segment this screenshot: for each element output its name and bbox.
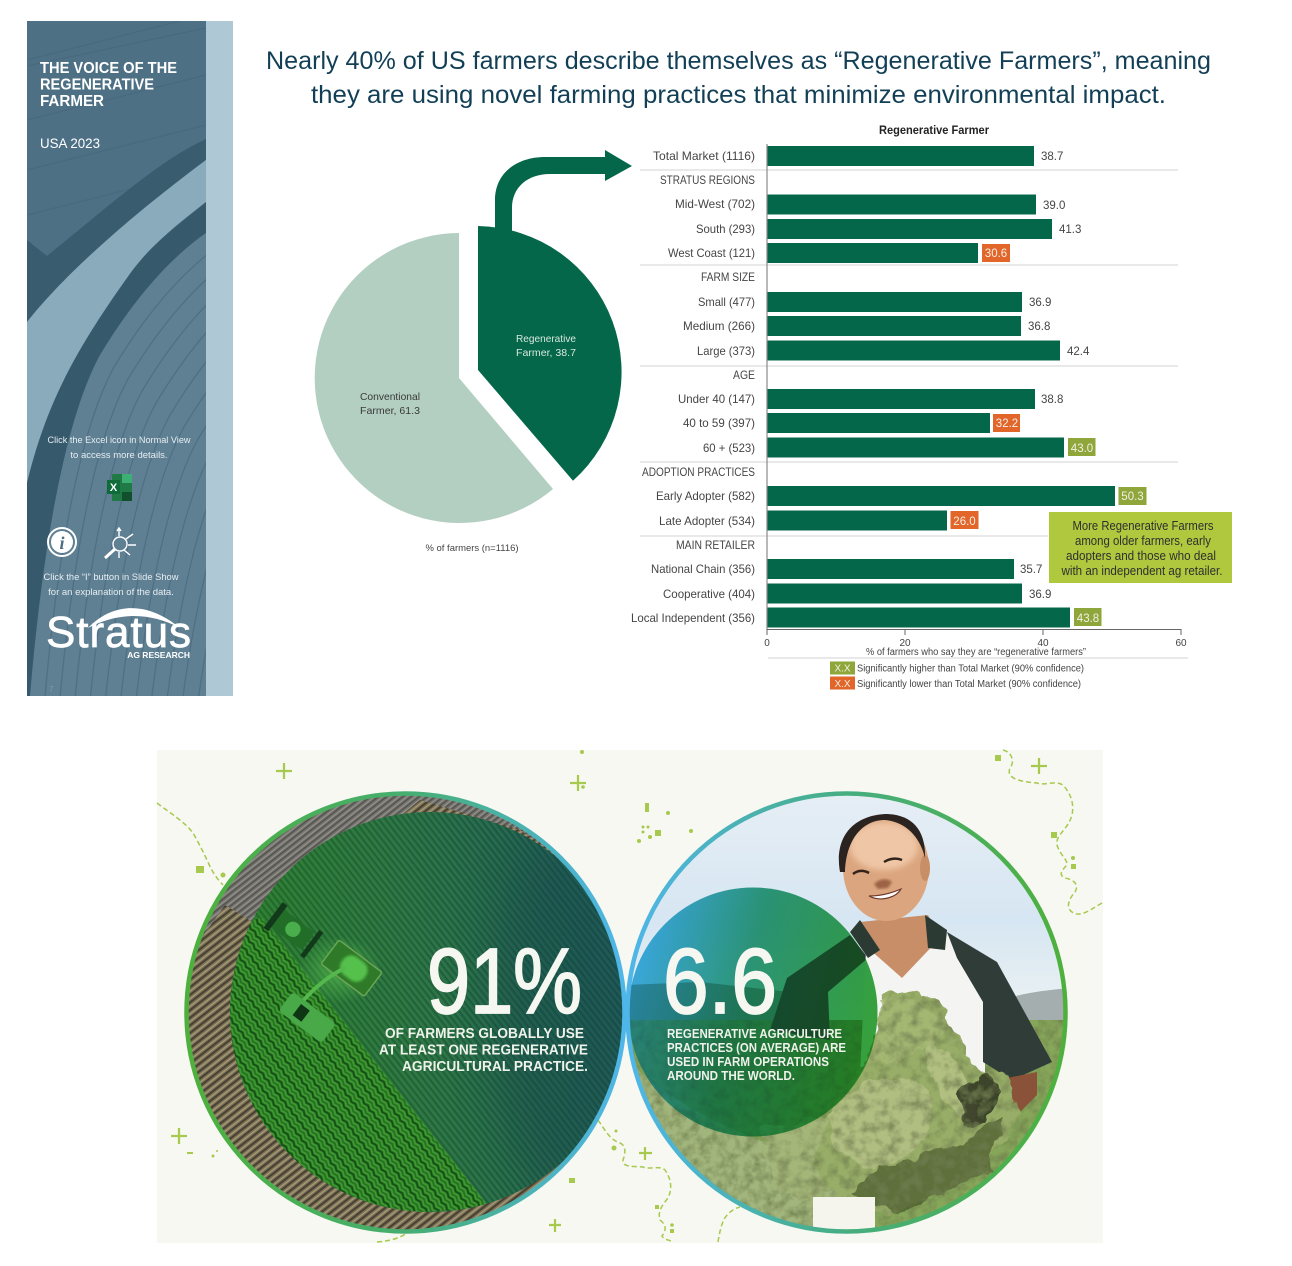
heading: stratus regions: STRATUS REGIONS xyxy=(660,173,755,187)
legend: significantly higher: X.X xyxy=(834,664,851,674)
stat: 91%: 91% xyxy=(427,929,582,1033)
row: west coast: West Coast (121) xyxy=(668,246,755,260)
pie label: regenerative: Regenerative xyxy=(516,333,576,345)
legend: significantly lower: Significantly lower than Total Market (90% confidence) xyxy=(857,679,1081,690)
stat caption: 6.6: AROUND THE WORLD. xyxy=(667,1069,795,1083)
pie slice: regenerative farmer xyxy=(478,226,622,481)
row: 40 to 59: 40 to 59 (397) xyxy=(683,416,755,430)
bar chart: regenerative farmer by segment xyxy=(631,125,1188,658)
row: cooperative xyxy=(663,584,1051,604)
row: mid-west: 39.0 xyxy=(1043,200,1065,212)
row: south xyxy=(696,219,1081,239)
row: 40 to 59 xyxy=(683,413,1020,433)
pie label: conventional: Farmer, 61.3 xyxy=(360,405,420,417)
title: they are using novel farming practices that minimize environmental impact. xyxy=(311,81,1166,109)
sidebar year: USA 2023 xyxy=(40,135,100,151)
row: total market: 38.7 xyxy=(1041,151,1063,163)
row: west coast xyxy=(668,243,1010,263)
row: cooperative: 36.9 xyxy=(1029,589,1051,601)
photo circle: farmer with lettuce xyxy=(627,793,1070,1235)
heading: adoption practices: ADOPTION PRACTICES xyxy=(642,465,755,479)
row: late adopter: Late Adopter (534) xyxy=(659,514,755,528)
icon: magnifier with arrows xyxy=(105,528,136,558)
row: 60 plus xyxy=(703,438,1096,458)
excel instruction: to access more details. xyxy=(70,450,168,461)
row: total market xyxy=(653,146,1063,166)
callout: key takeaway: among older farmers, early xyxy=(1075,534,1212,548)
legend: significantly higher: Significantly higher than Total Market (90% confidence) xyxy=(857,664,1084,674)
chart axes: 40 xyxy=(1037,638,1049,649)
farmer xyxy=(770,814,1052,1112)
icon: info button: i xyxy=(59,533,65,553)
chart axes: 0 xyxy=(764,638,770,649)
row: small xyxy=(698,292,1051,312)
icon: excel xyxy=(107,474,132,501)
row: mid-west: Mid-West (702) xyxy=(675,197,755,211)
row: early adopter: 50.3 xyxy=(1121,491,1144,503)
pie chart xyxy=(315,226,622,554)
pie label: conventional: Conventional xyxy=(360,391,420,403)
translucent colour disc xyxy=(628,888,878,1136)
row: small: Small (477) xyxy=(698,295,755,309)
row: medium xyxy=(683,316,1050,336)
callout: key takeaway: with an independent ag retailer. xyxy=(1061,564,1222,578)
arrow: pie to total market xyxy=(495,150,632,233)
chart heading: Regenerative Farmer xyxy=(879,125,989,137)
row: local independent: 43.8 xyxy=(1077,613,1099,625)
chart axes: 20 xyxy=(899,638,911,649)
excel instruction: Click the Excel icon in Normal View xyxy=(48,435,191,446)
sidebar heading: REGENERATIVE xyxy=(40,76,154,94)
row: 60 plus: 60 + (523) xyxy=(703,441,755,455)
row: large xyxy=(697,340,1090,360)
row: national chain: 35.7 xyxy=(1020,564,1042,576)
icon: excel: X xyxy=(110,482,118,494)
row: local independent xyxy=(631,608,1102,628)
row: medium: 36.8 xyxy=(1028,321,1050,333)
stat caption: 6.6: USED IN FARM OPERATIONS xyxy=(667,1055,829,1069)
row: small: 36.9 xyxy=(1029,297,1051,309)
decorative plus signs and dots xyxy=(171,750,1076,1233)
row: national chain: National Chain (356) xyxy=(651,562,755,576)
sidebar heading: FARMER xyxy=(40,93,104,110)
heading: main retailer: MAIN RETAILER xyxy=(676,538,755,552)
legend: significantly lower xyxy=(830,676,1081,690)
logo: Stratus AG Research: AG RESEARCH xyxy=(127,650,190,660)
stat caption: 91%: OF FARMERS GLOBALLY USE xyxy=(385,1026,584,1042)
stat caption: 6.6: REGENERATIVE AGRICULTURE xyxy=(667,1027,842,1041)
stat caption: 91%: AT LEAST ONE REGENERATIVE xyxy=(379,1042,588,1058)
row: national chain xyxy=(651,559,1042,579)
row: large: Large (373) xyxy=(697,344,755,358)
legend xyxy=(830,662,1084,690)
row: mid-west xyxy=(675,194,1065,214)
row: medium: Medium (266) xyxy=(683,319,755,333)
row: late adopter: 26.0 xyxy=(953,516,976,528)
row: early adopter xyxy=(656,486,1146,506)
slide show instruction: Click the “I” button in Slide Show xyxy=(44,572,179,583)
decorative dashed trails xyxy=(157,750,1102,1242)
stat caption: 91%: AGRICULTURAL PRACTICE. xyxy=(402,1059,588,1075)
pie slice: conventional farmer xyxy=(315,233,553,523)
row: west coast: 30.6 xyxy=(985,248,1007,260)
row: local independent: Local Independent (356) xyxy=(631,611,755,625)
callout: key takeaway: More Regenerative Farmers xyxy=(1072,519,1214,533)
row: early adopter: Early Adopter (582) xyxy=(656,489,755,503)
row: large: 42.4 xyxy=(1067,346,1090,358)
page number: 7 xyxy=(49,685,54,694)
sidebar heading: THE VOICE OF THE xyxy=(40,60,177,77)
axis title: % of farmers who say they are “regenerative farmers” xyxy=(866,647,1086,658)
panel: report cover sidebar xyxy=(27,21,233,696)
title xyxy=(266,47,1211,109)
row: late adopter xyxy=(659,510,978,530)
photo circle: aerial harvest xyxy=(186,793,640,1233)
heading: age: AGE xyxy=(733,368,755,382)
row: under 40: Under 40 (147) xyxy=(678,392,755,406)
stat: 6.6: 6.6 xyxy=(663,929,777,1033)
row: under 40 xyxy=(678,389,1063,409)
heading: farm size: FARM SIZE xyxy=(701,270,755,284)
row: 60 plus: 43.0 xyxy=(1071,443,1093,455)
pie label: regenerative: Farmer, 38.7 xyxy=(516,347,576,359)
icon: info button xyxy=(48,528,76,556)
slide show instruction: for an explanation of the data. xyxy=(48,587,174,598)
row: cooperative: Cooperative (404) xyxy=(663,587,755,601)
chart axes xyxy=(764,144,1187,649)
row: total market: Total Market (1116) xyxy=(653,149,755,163)
row: 40 to 59: 32.2 xyxy=(996,418,1018,430)
pie footnote: % of farmers (n=1116) xyxy=(426,543,518,554)
row: under 40: 38.8 xyxy=(1041,394,1063,406)
stat caption: 6.6: PRACTICES (ON AVERAGE) ARE xyxy=(667,1041,846,1055)
legend: significantly lower: X.X xyxy=(834,679,851,690)
callout: key takeaway xyxy=(1049,512,1232,583)
callout: key takeaway: adopters and those who deal xyxy=(1066,549,1216,563)
panel: global regenerative agriculture stats xyxy=(157,750,1103,1243)
harvester machinery xyxy=(263,902,382,1043)
chart axes: 60 xyxy=(1175,638,1187,649)
row: south: South (293) xyxy=(696,222,755,236)
title: Nearly 40% of US farmers describe themselves as “Regenerative Farmers”, meaning xyxy=(266,47,1211,75)
row: south: 41.3 xyxy=(1059,224,1081,236)
logo: Stratus AG Research: Stratus xyxy=(46,608,191,657)
lettuce xyxy=(760,990,1018,1218)
